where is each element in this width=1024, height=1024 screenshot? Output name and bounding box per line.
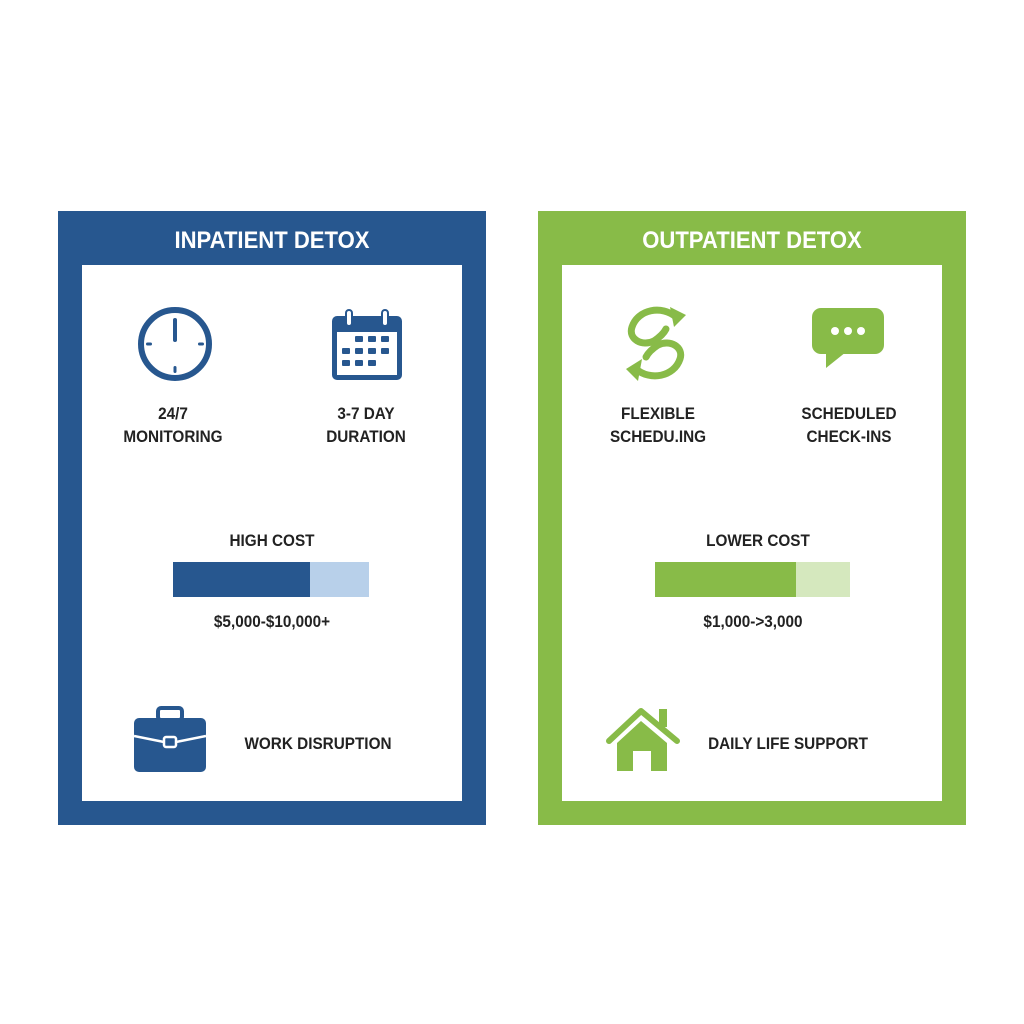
text: work disruption: WORK DISRUPTION [244, 734, 392, 753]
heading: inpatient: INPATIENT DETOX [174, 227, 370, 254]
panel: inpatient [58, 211, 486, 825]
text: price: $5,000-$10,000+ [214, 612, 330, 631]
text: flexible scheduling: FLEXIBLE [621, 404, 695, 423]
icon: briefcase [134, 706, 206, 772]
icon: sync arrows [626, 306, 686, 381]
bar: lower cost [655, 562, 850, 597]
text: check-ins: SCHEDULED [801, 404, 897, 423]
text: duration [326, 404, 406, 446]
bar: high cost [173, 562, 369, 597]
icon: house [606, 708, 680, 771]
text: daily life support: DAILY LIFE SUPPORT [708, 734, 868, 753]
text: price: $1,000->3,000 [703, 612, 803, 631]
text: duration: 3-7 DAY [337, 404, 395, 423]
text: check-ins: CHECK-INS [806, 427, 891, 446]
heading: outpatient: OUTPATIENT DETOX [642, 227, 862, 254]
text: flexible scheduling [610, 404, 706, 446]
icon: chat bubble [812, 308, 884, 368]
text: flexible scheduling: SCHEDU.ING [610, 427, 706, 446]
icon: calendar [332, 309, 402, 380]
panel: outpatient [538, 211, 966, 825]
text: check-ins [801, 404, 897, 446]
icon: clock [138, 307, 212, 381]
text: high cost: HIGH COST [229, 531, 314, 550]
text: monitoring: 24/7 [158, 404, 188, 423]
text: monitoring: MONITORING [123, 427, 223, 446]
text: monitoring [123, 404, 223, 446]
text: duration: DURATION [326, 427, 406, 446]
text: lower cost: LOWER COST [706, 531, 810, 550]
